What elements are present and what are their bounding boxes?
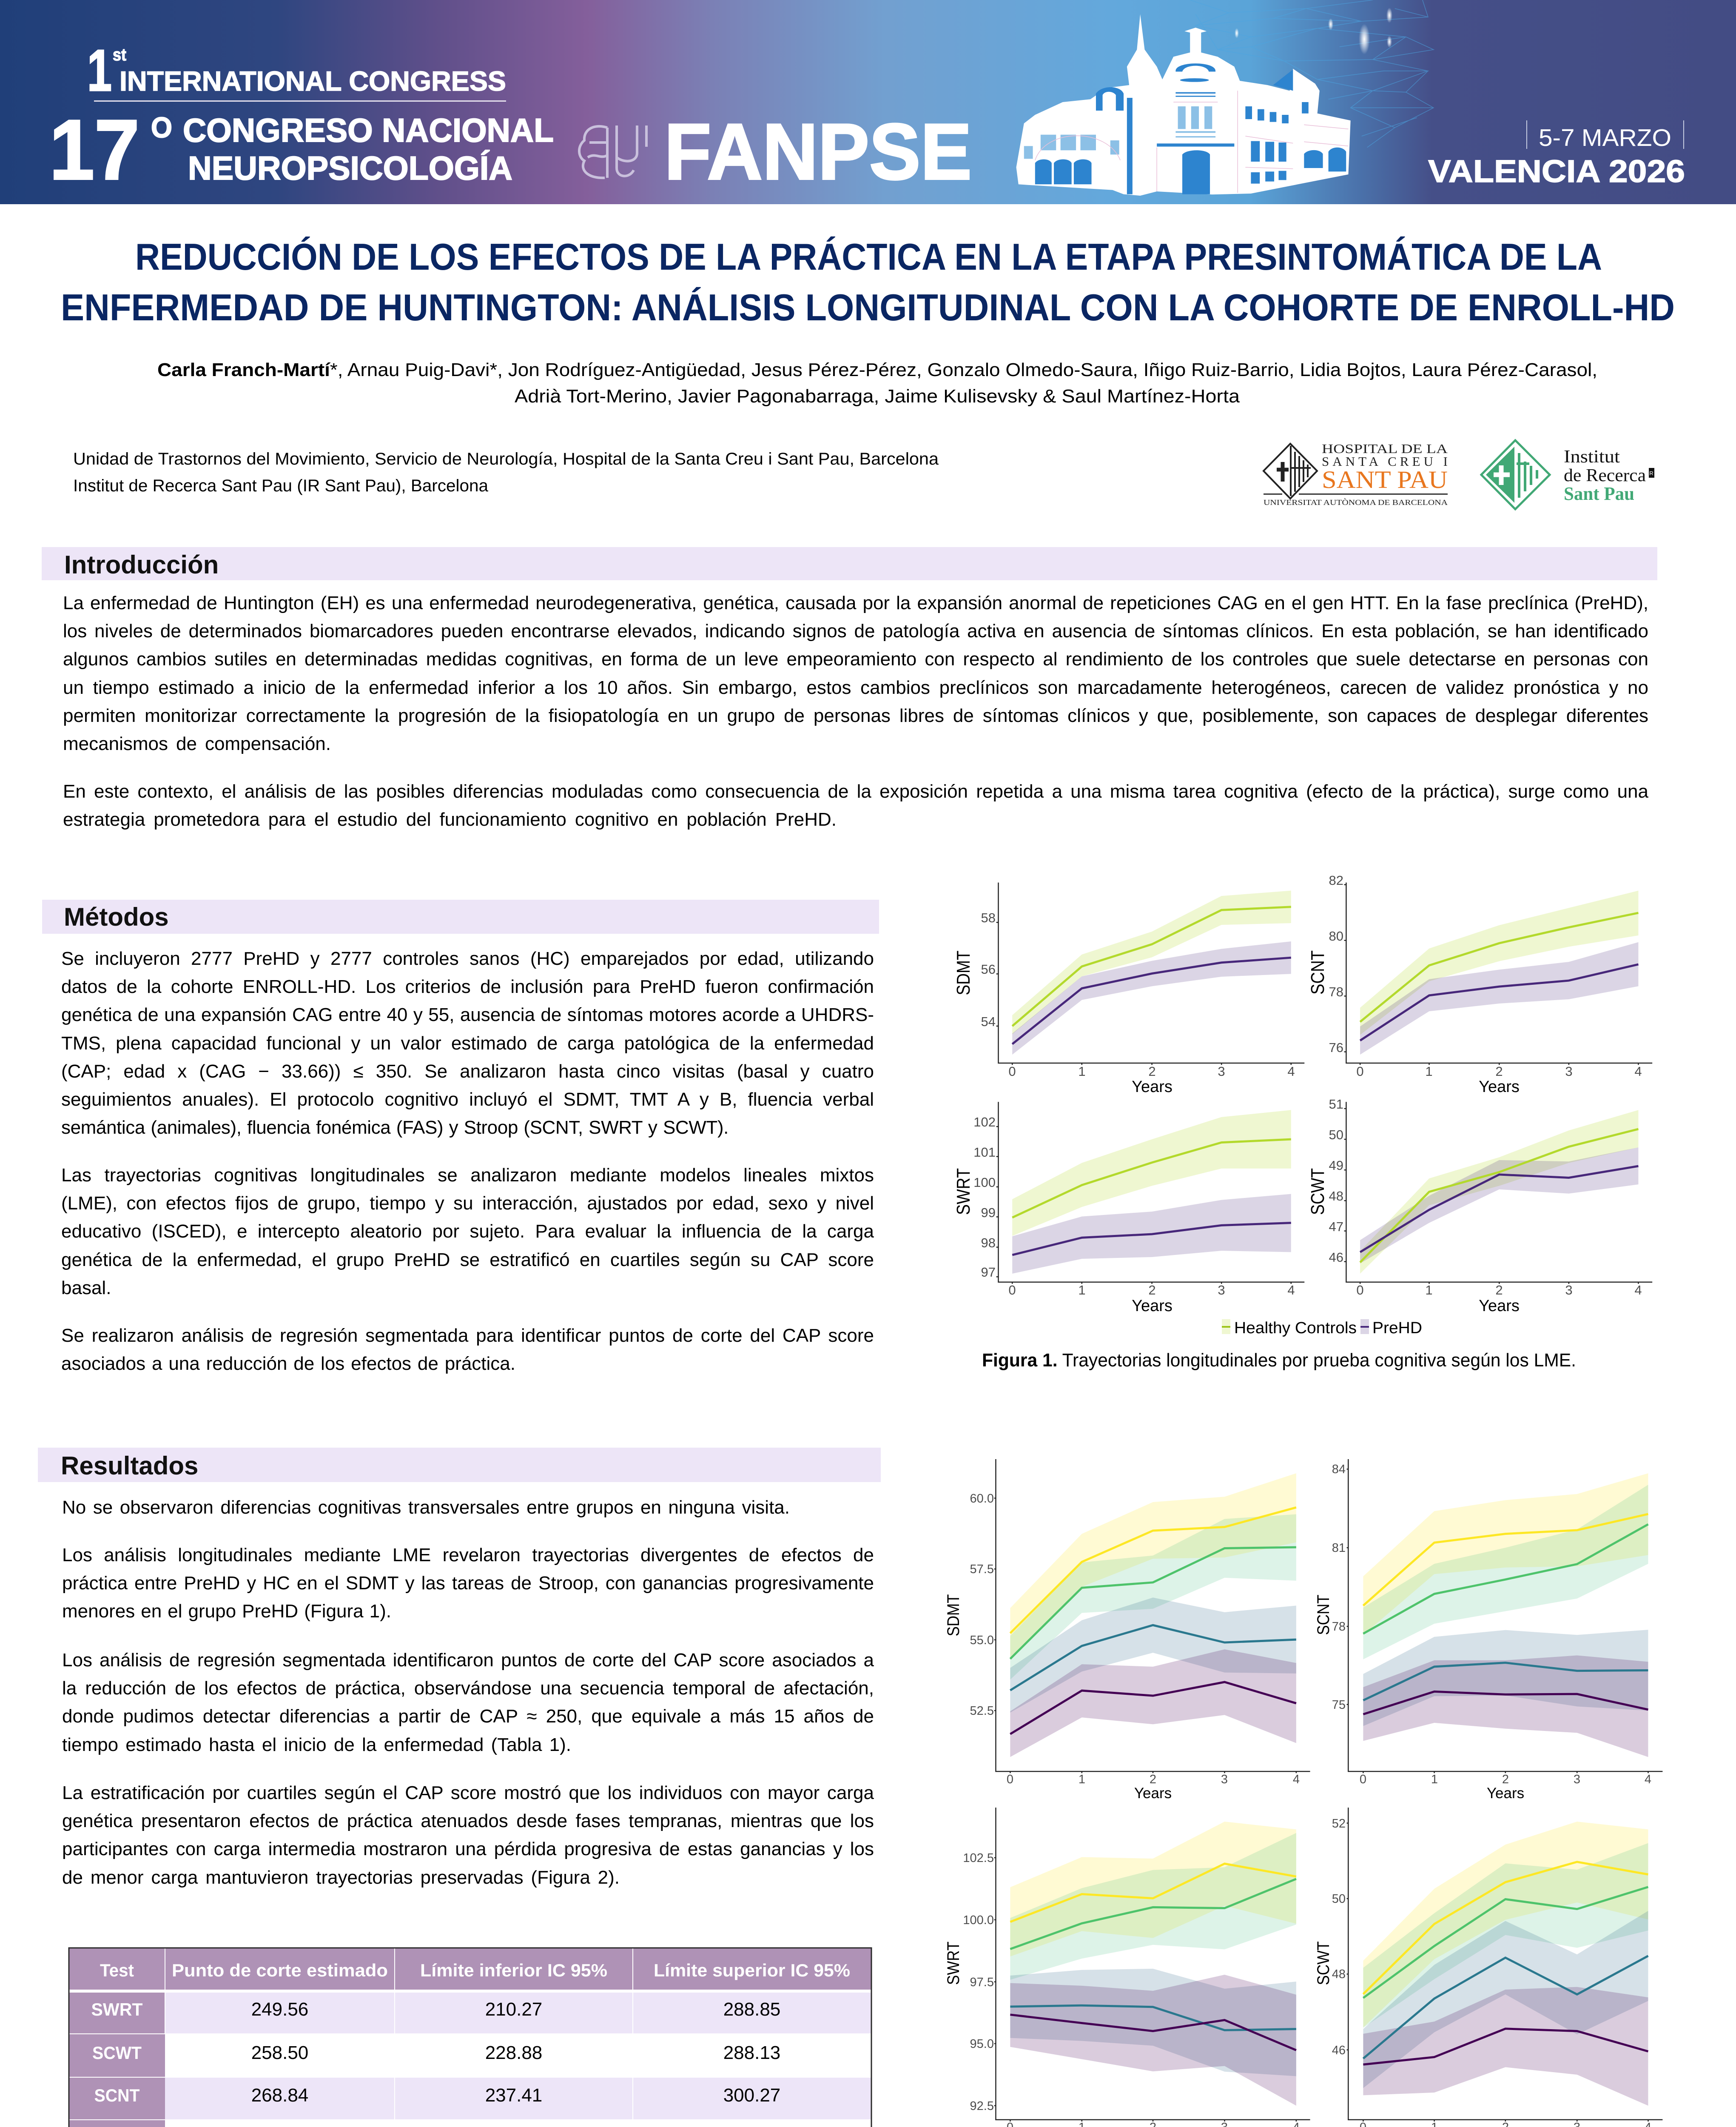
congress line: 17 Congreso Nacional Neuropsicología: 17 — [49, 103, 139, 197]
chart: Figure 2 SWRT — [944, 1808, 1310, 2127]
axis labels: SWRT: 101 — [973, 1145, 996, 1160]
axis labels: SDMT: 56 — [981, 962, 996, 977]
axis labels: SCNT: 76 — [1329, 1040, 1343, 1055]
authors: Carla Franch-Martí *, Arnau Puig-Davi*, Jon Rodríguez-Antigüedad, Jesus Pérez-Pérez, Gonzalo Olmedo-Saura, Iñigo Ruiz-Barrio, Lidia Bojtos, Laura Pérez-Carasol, — [157, 359, 1597, 380]
axis labels: SWRT: 92.5 — [970, 2099, 994, 2113]
header banner — [0, 0, 1736, 204]
axis labels: SDMT — [944, 1492, 1300, 1802]
text block: results paragraph 2: menores en el grupo PreHD (Figura 1). — [62, 1601, 391, 1622]
heading: Métodos: Métodos — [64, 903, 169, 931]
axis labels: SCNT: 80 — [1329, 929, 1343, 944]
logo: Institut de Recerca Sant Pau: Institut — [1564, 447, 1620, 467]
table row: SCNT — [69, 2078, 871, 2119]
congress line: 1st International Congress: INTERNATIONAL CONGRESS — [120, 66, 506, 97]
axis labels: SWRT: 100 — [973, 1175, 996, 1190]
data: SWRT quartile bands and lines — [994, 1808, 1310, 2121]
text block: results paragraph 2: práctica entre PreHD y HC en el SDMT y las tareas de Stroop, con ganancias progresivamente — [62, 1573, 874, 1594]
table row: SCWT — [69, 2034, 780, 2077]
axis labels: SDMT: 54 — [981, 1014, 996, 1029]
authors: Adrià Tort-Merino, Javier Pagonabarraga, Jaime Kulisevsky & Saul Martínez-Horta — [515, 386, 1240, 407]
text block: results paragraph 4: genética presentaron efectos de práctica atenuados desde fases tempranas, mientras que los — [62, 1811, 874, 1831]
table row: SDMT — [69, 2120, 780, 2127]
heading: Introducción: Introducción — [64, 550, 219, 579]
axis labels: SCWT — [1314, 1817, 1651, 2127]
data: SDMT quartile bands and lines — [994, 1459, 1310, 1773]
axis labels: SDMT: SDMT — [953, 950, 974, 995]
title — [61, 236, 1675, 328]
event date and place — [1428, 120, 1685, 189]
axis labels: SCWT: 01234 — [1356, 1283, 1642, 1297]
axis labels: SWRT: 97.5 — [970, 1976, 994, 1989]
logo: Institut de Recerca Sant Pau: de Recerca — [1564, 466, 1646, 485]
logo: Institut de Recerca Sant Pau — [1481, 440, 1654, 509]
logo: Hospital de la Santa Creu i Sant Pau: SANT PAU — [1322, 466, 1448, 493]
chart: Figure 1 SCWT — [1307, 1097, 1652, 1315]
axis labels: SWRT: 100.0 — [963, 1913, 994, 1927]
table row: SCWT: SCWT — [92, 2043, 142, 2063]
text block: results paragraph 3 — [62, 1646, 874, 1759]
chart: Figure 1 SCNT — [1307, 873, 1652, 1096]
text block: introduction paragraph 1: los niveles de determinados biomarcadores pueden encontrarse elevados, indicando signos de patología activa en ausencia de síntomas clínicos. En esta población, se han identificado — [63, 621, 1648, 642]
logo: Institut de Recerca Sant Pau: R — [1649, 470, 1653, 476]
table row: SWRT — [69, 1993, 871, 2033]
axis labels: SWRT: Years — [1132, 1297, 1173, 1315]
axis labels: SCNT: Years — [1487, 1785, 1524, 1802]
chart: Figure 2 SCNT — [1314, 1459, 1662, 1802]
text block: results paragraph 1: No se observaron diferencias cognitivas transversales entre grupos en ninguna visita. — [62, 1497, 790, 1518]
affiliations: Unidad de Trastornos del Movimiento, Servicio de Neurología, Hospital de la Santa Creu i Sant Pau, Barcelona — [73, 450, 939, 468]
axis labels: SCNT — [1314, 1463, 1651, 1802]
axis labels: SCWT: 47 — [1329, 1219, 1343, 1234]
axis labels: SWRT — [944, 1851, 1300, 2127]
table row: SWRT: 210.27 — [485, 1999, 542, 2020]
FANPSE wordmark: FANPSE — [664, 107, 972, 196]
axis labels: SCNT: 01234 — [1360, 1773, 1651, 1786]
axis labels: SDMT: 01234 — [1008, 1064, 1295, 1079]
axis labels: SDMT: Years — [1134, 1785, 1172, 1802]
text block: methods paragraph 2: educativo (ISCED), e intercepto aleatorio por sujeto. Para evaluar la influencia de la carga — [61, 1221, 874, 1242]
text block: results paragraph 3: tiempo estimado hasta el inicio de la enfermedad (Tabla 1). — [62, 1734, 571, 1755]
axis labels: SCWT: SCWT — [1314, 1942, 1333, 1985]
logo: Hospital de la Santa Creu i Sant Pau: HOSPITAL DE LA — [1322, 441, 1448, 456]
table row: SCNT: SCNT — [94, 2085, 140, 2105]
axis labels: SCNT — [1307, 873, 1642, 1096]
text block: methods paragraph 2: Las trayectorias cognitivas longitudinales se analizaron mediante modelos lineales mixtos — [61, 1165, 874, 1186]
table: CAP score change points — [69, 1948, 871, 2127]
axis labels: SCWT: 48 — [1332, 1967, 1346, 1981]
data: SCWT bands and lines — [1344, 1102, 1652, 1284]
axis labels: SCNT: 75 — [1332, 1698, 1346, 1712]
table row: SCNT: 300.27 — [723, 2085, 780, 2106]
axis labels: SWRT: 97 — [981, 1265, 996, 1280]
axis labels: SCWT: 48 — [1329, 1189, 1343, 1203]
text block: methods paragraph 1: TMS, plena capacidad funcional y un valor estimado de carga patológica de la enfermedad — [61, 1033, 874, 1054]
heading: Métodos — [42, 900, 879, 934]
congress line: 1st International Congress — [87, 38, 506, 103]
text block: introduction paragraph 1: mecanismos de compensación. — [63, 733, 331, 754]
chart: Figure 2 SDMT — [944, 1459, 1310, 1802]
text block: results paragraph 2 — [62, 1541, 874, 1626]
event date and place: VALENCIA 2026 — [1428, 154, 1685, 189]
text block: methods paragraph 3 — [61, 1322, 874, 1378]
axis labels: SDMT: SDMT — [944, 1594, 963, 1636]
axis labels: SCNT: SCNT — [1314, 1594, 1333, 1635]
congress line: 17 Congreso Nacional Neuropsicología: O — [151, 111, 172, 144]
heading: Resultados: Resultados — [61, 1451, 198, 1480]
axis labels: SWRT: 98 — [981, 1235, 996, 1250]
table header row — [69, 1948, 871, 1990]
text block: introduction paragraph 1: un tiempo estimado a inicio de la enfermedad inferior a los 10 años. Sin embargo, estos cambios preclínicos son marcadamente heterogéneos, carecen de validez pronóstica y no — [63, 677, 1648, 698]
chart: Figure 2 SCWT — [1314, 1808, 1662, 2127]
logo: Hospital de la Santa Creu i Sant Pau: SANTA CREU I — [1322, 454, 1448, 469]
table row: SWRT: 288.85 — [723, 1999, 780, 2020]
logo: Hospital de la Santa Creu i Sant Pau — [1264, 441, 1448, 507]
axis labels: SWRT: SWRT — [944, 1942, 963, 1985]
axis labels: SDMT: 58 — [981, 910, 996, 925]
text block: results paragraph 3: donde pudimos detectar diferencias a partir de CAP ≈ 250, que equivale a más 15 años de — [62, 1706, 874, 1727]
text block: methods paragraph 1: semántica (animales), fluencia fonémica (FAS) y Stroop (SCNT, SWRT y SCWT). — [61, 1117, 729, 1138]
axis labels: SCNT: 78 — [1332, 1620, 1346, 1634]
legend: Figure 1: Healthy Controls — [1234, 1319, 1357, 1337]
affiliations — [73, 450, 939, 495]
text block: methods paragraph 2 — [61, 1161, 874, 1302]
text block: methods paragraph 1: datos de la cohorte ENROLL-HD. Los criterios de inclusión para PreHD fueron confirmación — [61, 976, 874, 997]
table header row: Test — [100, 1960, 134, 1980]
icon: brain logo — [579, 125, 646, 178]
title: REDUCCIÓN DE LOS EFECTOS DE LA PRÁCTICA EN LA ETAPA PRESINTOMÁTICA DE LA — [135, 236, 1602, 278]
axis labels: SCWT: 46 — [1332, 2044, 1346, 2057]
logo: Hospital de la Santa Creu i Sant Pau: UNIVERSITAT AUTÒNOMA DE BARCELONA — [1264, 498, 1448, 507]
text block: introduction paragraph 2: En este contexto, el análisis de las posibles diferencias moduladas como consecuencia de la exposición repetida a una misma tarea cognitiva (efecto de la práctica), surge como una — [63, 781, 1648, 802]
text block: methods paragraph 2: (LME), con efectos fijos de grupo, tiempo y su interacción, ajustados por edad, sexo y nivel — [61, 1193, 874, 1214]
axis labels: SCWT: SCWT — [1307, 1168, 1328, 1215]
text block: methods paragraph 1: seguimientos anuales). El protocolo cognitivo incluyó el SDMT, TMT A y B, fluencia verbal — [61, 1089, 874, 1110]
axis labels: SWRT: SWRT — [953, 1168, 974, 1215]
heading: Resultados — [38, 1448, 881, 1482]
text block: introduction paragraph 1: permiten monitorizar correctamente la progresión de la fisiopatología en un grupo de personas libres de síntomas clínicos y que, posiblemente, son capaces de desplegar diferentes — [63, 705, 1648, 726]
data: SCNT quartile bands and lines — [1347, 1459, 1662, 1773]
axis labels: SCNT: 84 — [1332, 1463, 1346, 1476]
congress line: 17 Congreso Nacional Neuropsicología: CONGRESO NACIONAL — [183, 111, 554, 149]
text block: introduction paragraph 2 — [63, 778, 1648, 834]
congress line: 17 Congreso Nacional Neuropsicología — [49, 103, 554, 197]
data: SDMT bands and lines — [996, 883, 1304, 1065]
axis labels: SCNT: 78 — [1329, 984, 1343, 999]
text block: introduction paragraph 1: algunos cambios sutiles en determinadas medidas cognitivas, en forma de un leve empeoramiento con respecto al rendimiento de los controles que suele detectarse en personas con — [63, 649, 1648, 670]
axis labels: SDMT: 52.5 — [970, 1704, 994, 1718]
title: ENFERMEDAD DE HUNTINGTON: ANÁLISIS LONGITUDINAL CON LA COHORTE DE ENROLL-HD — [61, 286, 1675, 328]
congress line: 1st International Congress: 1 — [87, 38, 112, 103]
text block: introduction paragraph 1 — [63, 589, 1648, 758]
authors — [157, 359, 1597, 407]
axis labels: SDMT: 55.0 — [970, 1634, 994, 1647]
illustration: Valencia building — [1016, 14, 1351, 196]
axis labels: SWRT: 102.5 — [963, 1851, 994, 1865]
table row: SWRT: 249.56 — [251, 1999, 308, 2020]
text block: methods paragraph 2: genética de la enfermedad, el grupo PreHD se estratificó en cuartiles según su CAP score — [61, 1249, 874, 1270]
congress line: 17 Congreso Nacional Neuropsicología: NEUROPSICOLOGÍA — [188, 149, 512, 187]
text block: results paragraph 3: Los análisis de regresión segmentada identificaron puntos de corte del CAP score asociados a — [62, 1650, 874, 1671]
congress line: 1st International Congress: st — [113, 46, 126, 64]
axis labels: SWRT: 95.0 — [970, 2037, 994, 2051]
heading: Introducción — [42, 547, 1657, 580]
axis labels: SCNT: 81 — [1332, 1541, 1346, 1555]
axis labels: SCNT: 01234 — [1356, 1064, 1642, 1079]
axis labels: SCWT: 50 — [1329, 1127, 1343, 1142]
axis labels: SCWT — [1307, 1097, 1642, 1315]
chart: Figure 1 SWRT — [953, 1102, 1304, 1315]
axis labels: SCWT: 52 — [1332, 1817, 1346, 1830]
axis labels: SWRT: 99 — [981, 1205, 996, 1220]
text block: introduction paragraph 1: La enfermedad de Huntington (EH) es una enfermedad neurodegenerativa, genética, causada por la expansión anormal de repeticiones CAG en el gen HTT. En la fase preclínica (PreHD), — [63, 593, 1648, 613]
axis labels: SCNT: SCNT — [1307, 950, 1328, 995]
table header row: Punto de corte estimado — [172, 1960, 388, 1980]
table row: SCWT: 258.50 — [251, 2042, 308, 2063]
axis labels: SDMT: 57.5 — [970, 1562, 994, 1576]
axis labels: SCWT: 50 — [1332, 1892, 1346, 1906]
event date and place: 5-7 MARZO — [1539, 124, 1671, 151]
table row: SCNT: 237.41 — [485, 2085, 542, 2106]
data: SCWT quartile bands and lines — [1347, 1808, 1662, 2121]
text block: methods paragraph 3: asociados a una reducción de los efectos de práctica. — [61, 1353, 515, 1374]
text block: methods paragraph 3: Se realizaron análisis de regresión segmentada para identificar puntos de corte del CAP score — [61, 1325, 874, 1346]
chart: Figure 1 SDMT — [953, 883, 1304, 1096]
table row: SCWT: 288.13 — [723, 2042, 780, 2063]
legend: Figure 1 — [1222, 1319, 1422, 1337]
axis labels: SCNT: 82 — [1329, 873, 1343, 888]
legend: Figure 1: PreHD — [1372, 1319, 1422, 1337]
table header row: Límite superior IC 95% — [654, 1960, 850, 1980]
data: SCNT bands and lines — [1344, 883, 1652, 1065]
axis labels: SCWT: 46 — [1329, 1250, 1343, 1265]
axis labels: SWRT — [953, 1115, 1295, 1315]
text block: methods paragraph 1: Se incluyeron 2777 PreHD y 2777 controles sanos (HC) emparejados por edad, utilizando — [61, 948, 874, 969]
affiliations: Institut de Recerca Sant Pau (IR Sant Pau), Barcelona — [73, 476, 489, 495]
axis labels: SCWT: 51 — [1329, 1097, 1343, 1112]
logo: Institut de Recerca Sant Pau: Sant Pau — [1564, 483, 1634, 504]
axis labels: SWRT: 102 — [973, 1115, 996, 1129]
text block: results paragraph 4: de menor carga mantuvieron trayectorias preservadas (Figura 2). — [62, 1867, 620, 1888]
table row: SCNT: 268.84 — [251, 2085, 308, 2106]
table row: SWRT: SWRT — [91, 1999, 143, 2019]
axis labels: SCWT: Years — [1479, 1297, 1520, 1315]
axis labels: SDMT — [953, 910, 1295, 1096]
text block: methods paragraph 1: genética de una expansión CAG entre 40 y 55, ausencia de síntomas motores acorde a UHDRS- — [61, 1004, 874, 1025]
data: SWRT bands and lines — [996, 1102, 1304, 1284]
axis labels: SWRT: 01234 — [1008, 1283, 1295, 1297]
text block: results paragraph 4 — [62, 1779, 874, 1892]
text block: methods paragraph 1: (CAP; edad x (CAG − 33.66)) ≤ 350. Se analizaron hasta cinco visitas (basal y cuatro — [61, 1061, 874, 1082]
table header row: Límite inferior IC 95% — [420, 1960, 607, 1980]
caption: Figure 1: Figura 1. Trayectorias longitudinales por prueba cognitiva según los LME. — [982, 1350, 1576, 1371]
text block: methods paragraph 1 — [61, 945, 874, 1142]
text block: results paragraph 3: la reducción de los efectos de práctica, observándose una secuencia temporal de afectación, — [62, 1678, 874, 1699]
table row: SCWT: 228.88 — [485, 2042, 542, 2063]
axis labels: SCNT: Years — [1479, 1078, 1520, 1096]
axis labels: SDMT: 01234 — [1007, 1773, 1300, 1786]
text block: results paragraph 4: La estratificación por cuartiles según el CAP score mostró que los individuos con mayor carga — [62, 1782, 874, 1803]
axis labels: SDMT: Years — [1132, 1078, 1173, 1096]
axis labels: SDMT: 60.0 — [970, 1492, 994, 1505]
text block: methods paragraph 2: basal. — [61, 1277, 111, 1298]
text block: introduction paragraph 2: estrategia prometedora para el estudio del funcionamiento cognitivo en población PreHD. — [63, 809, 837, 830]
text block: results paragraph 2: Los análisis longitudinales mediante LME revelaron trayectorias divergentes de efectos de — [62, 1545, 874, 1565]
axis labels: SCWT: 49 — [1329, 1158, 1343, 1173]
decorative network mesh — [1190, 0, 1434, 148]
text block: results paragraph 4: participantes con carga intermedia mostraron una pérdida progresiva de estas ganancias y los — [62, 1839, 874, 1859]
stars — [1235, 8, 1392, 54]
